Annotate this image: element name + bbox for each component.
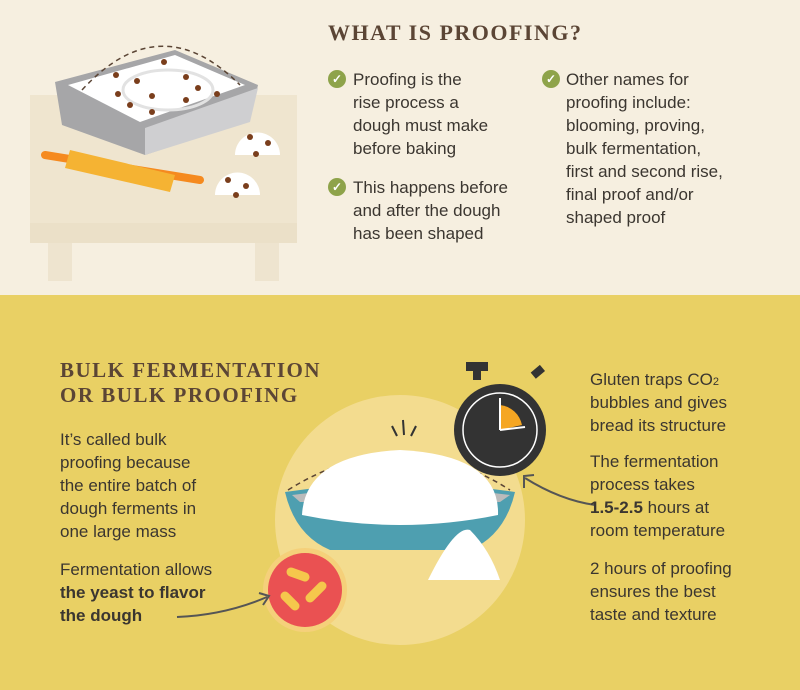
text: fermentation time	[590, 452, 725, 540]
text: gluten: bread its structure	[590, 416, 726, 435]
text: 2 hours: ensures the best	[590, 582, 716, 601]
text: fermentation flavor: the dough	[60, 606, 142, 625]
illustration: bowl with dough, timer, yeast	[263, 362, 546, 645]
panel: bulk fermentation	[0, 295, 800, 690]
text: 2 hours	[590, 559, 732, 624]
bullet 3: final proof and/or	[566, 185, 694, 204]
text: fermentation flavor: Fermentation allows	[60, 560, 212, 579]
heading: bulk fermentation: OR BULK PROOFING	[60, 383, 299, 407]
text: fermentation time: 1.5-2.5 hours at	[590, 498, 709, 517]
bullet 2	[328, 178, 508, 243]
bullet 1: before baking	[353, 139, 456, 158]
heading: bulk fermentation	[60, 358, 321, 407]
bullet 1: Proofing is the	[353, 70, 462, 89]
illustration: baking pan on table	[30, 46, 297, 281]
text: fermentation time: room temperature	[590, 521, 725, 540]
text: fermentation flavor: the yeast to flavor	[60, 583, 206, 602]
text: bulk proofing	[60, 430, 196, 541]
text: 2 hours: 2 hours of proofing	[590, 559, 732, 578]
bullet 3: first and second rise,	[566, 162, 723, 181]
bullet 3: shaped proof	[566, 208, 665, 227]
bullet 2: and after the dough	[353, 201, 500, 220]
arrow to yeast	[176, 592, 270, 618]
text: bulk proofing: dough ferments in	[60, 499, 196, 518]
text: bulk proofing: the entire batch of	[60, 476, 196, 495]
bullet 1	[328, 70, 488, 158]
bullet 3: blooming, proving,	[566, 116, 705, 135]
bullet 3: bulk fermentation,	[566, 139, 701, 158]
text: fermentation time: process takes	[590, 475, 695, 494]
text: 2 hours: taste and texture	[590, 605, 717, 624]
text: gluten: Gluten traps CO2	[590, 370, 719, 389]
text: gluten: bubbles and gives	[590, 393, 727, 412]
bullet 3: proofing include:	[566, 93, 691, 112]
bullet 1: rise process a	[353, 93, 459, 112]
bullet 2: ✓	[332, 180, 342, 194]
text: bulk proofing: It’s called bulk	[60, 430, 166, 449]
text: gluten	[590, 370, 727, 435]
text: bulk proofing: one large mass	[60, 522, 176, 541]
bullet 3	[542, 70, 723, 227]
bullet 3: Other names for	[566, 70, 689, 89]
bullet 2: has been shaped	[353, 224, 483, 243]
heading: what is proofing: WHAT IS PROOFING?	[328, 20, 582, 45]
text: bulk proofing: proofing because	[60, 453, 190, 472]
text: fermentation flavor	[60, 560, 212, 625]
bullet 1: ✓	[332, 72, 342, 86]
bullet 2: This happens before	[353, 178, 508, 197]
bullet 1: dough must make	[353, 116, 488, 135]
panel: what is proofing	[0, 0, 800, 295]
bullet 3: ✓	[546, 72, 556, 86]
text: fermentation time: The fermentation	[590, 452, 719, 471]
heading: bulk fermentation: BULK FERMENTATION	[60, 358, 321, 382]
arrow to timer	[523, 474, 594, 506]
